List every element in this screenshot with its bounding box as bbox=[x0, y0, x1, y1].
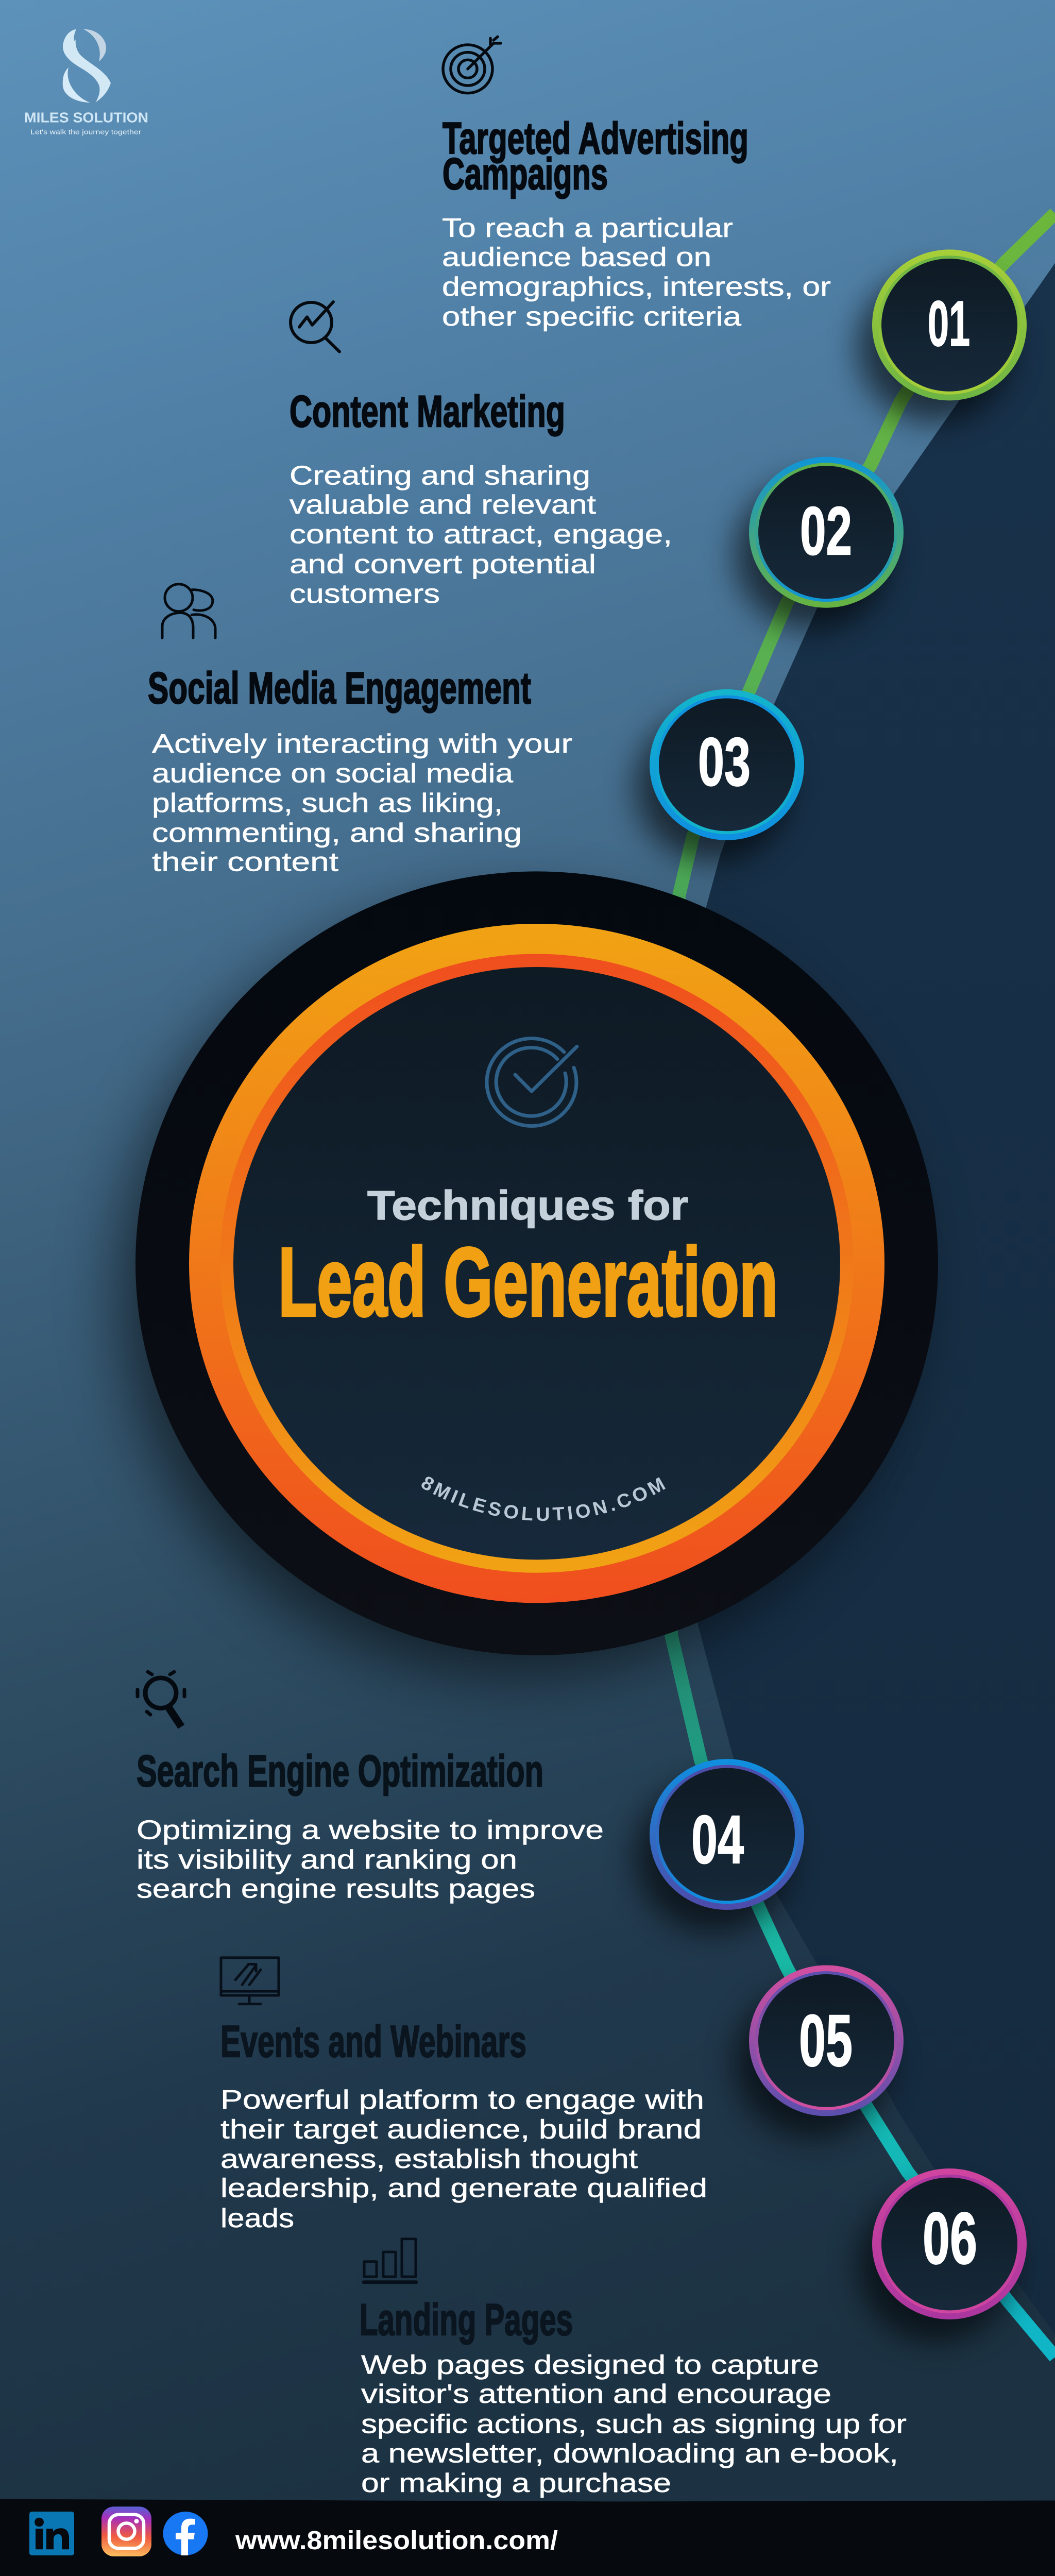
text 01: To reach a particular bbox=[442, 214, 733, 243]
connecting timeline line bbox=[670, 213, 1055, 2357]
text 01: demographics, interests, or bbox=[442, 273, 831, 302]
text 04 bbox=[137, 1816, 604, 1904]
logo: 8 Miles Solution bbox=[24, 29, 148, 136]
text 04: its visibility and ranking on bbox=[137, 1845, 517, 1875]
step 01: targeted advertising bbox=[442, 37, 831, 332]
text 05: Powerful platform to engage with bbox=[220, 2085, 704, 2115]
icon: instagram bbox=[101, 2506, 151, 2556]
text 01 bbox=[442, 214, 831, 332]
heading 01 bbox=[443, 114, 748, 199]
website url: www.8milesolution.com/ bbox=[235, 2526, 558, 2555]
heading 05: Events and Webinars bbox=[220, 2017, 526, 2066]
icon: facebook bbox=[163, 2512, 208, 2555]
badge 02 bbox=[735, 457, 904, 630]
text 02: Creating and sharing bbox=[290, 461, 590, 490]
badge 04 bbox=[636, 1759, 804, 1932]
text 06: visitor's attention and encourage bbox=[361, 2380, 831, 2409]
icon: target bbox=[443, 37, 501, 93]
icon: people bbox=[162, 584, 215, 638]
text 05: leads bbox=[220, 2204, 294, 2233]
curved website text: 8MILESOLUTION.COM bbox=[421, 1477, 666, 1521]
text 04: search engine results pages bbox=[137, 1874, 535, 1904]
badge 01: 01 bbox=[928, 287, 970, 360]
step 04: search engine optimization bbox=[137, 1672, 604, 1904]
badge 05 bbox=[735, 1965, 904, 2138]
text 03: audience on social media bbox=[152, 759, 514, 788]
text 01: other specific criteria bbox=[442, 302, 742, 332]
text 03: commenting, and sharing bbox=[152, 818, 522, 848]
text 02: content to attract, engage, bbox=[290, 520, 672, 550]
text 03: Actively interacting with your bbox=[152, 729, 572, 759]
text 05: awareness, establish thought bbox=[220, 2145, 638, 2174]
icon: analytics magnifier bbox=[291, 302, 339, 352]
text 02 bbox=[290, 461, 672, 609]
logo: 8 Miles Solution: MILES SOLUTION bbox=[24, 110, 148, 125]
footer bar bbox=[0, 2499, 1055, 2576]
text 03: their content bbox=[152, 848, 339, 877]
text 06: a newsletter, downloading an e-book, bbox=[361, 2439, 898, 2468]
step 02: content marketing bbox=[290, 302, 672, 609]
icon: linkedin bbox=[29, 2512, 74, 2555]
badge 06 bbox=[858, 2168, 1027, 2342]
text 05 bbox=[220, 2085, 707, 2233]
text 03 bbox=[152, 729, 572, 877]
icon: bar chart bbox=[364, 2239, 416, 2282]
badge 03 bbox=[636, 689, 804, 862]
text 05: leadership, and generate qualified bbox=[220, 2174, 707, 2204]
badge 01 bbox=[858, 249, 1027, 422]
text 02: customers bbox=[290, 579, 440, 609]
step 03: social media engagement bbox=[148, 584, 572, 877]
text 01: audience based on bbox=[442, 243, 711, 272]
heading 04: Search Engine Optimization bbox=[137, 1747, 543, 1796]
badge 02: 02 bbox=[800, 493, 852, 569]
text 06 bbox=[361, 2350, 907, 2498]
badge 04: 04 bbox=[691, 1802, 744, 1878]
text 05: their target audience, build brand bbox=[220, 2115, 702, 2144]
central circle bbox=[98, 866, 938, 1696]
dark right panel bbox=[690, 263, 1055, 2516]
text 02: and convert potential bbox=[290, 550, 596, 579]
text 02: valuable and relevant bbox=[290, 490, 597, 520]
step 06: landing pages bbox=[360, 2239, 907, 2498]
title line 1: Techniques for bbox=[367, 1183, 688, 1229]
heading 02: Content Marketing bbox=[290, 387, 565, 436]
logo: 8 Miles Solution: Let's walk the journey together bbox=[30, 128, 142, 136]
text 06: or making a purchase bbox=[361, 2468, 671, 2498]
title line 2: Lead Generation bbox=[278, 1227, 778, 1336]
icon: monitor with arrows bbox=[221, 1958, 279, 2004]
text 04: Optimizing a website to improve bbox=[137, 1816, 604, 1845]
heading 01: Campaigns bbox=[443, 149, 608, 199]
text 03: platforms, such as liking, bbox=[152, 789, 503, 818]
icon: gear magnifier bbox=[138, 1672, 184, 1727]
heading 06: Landing Pages bbox=[360, 2295, 573, 2345]
step 05: events and webinars bbox=[220, 1958, 707, 2233]
text 06: Web pages designed to capture bbox=[361, 2350, 819, 2380]
icon: check mark badge bbox=[487, 1039, 577, 1126]
badge 05: 05 bbox=[799, 1999, 853, 2081]
heading 03: Social Media Engagement bbox=[148, 664, 531, 713]
text 06: specific actions, such as signing up for bbox=[361, 2410, 907, 2439]
heading 01: Targeted Advertising bbox=[443, 114, 748, 163]
badge 06: 06 bbox=[923, 2197, 977, 2279]
badge 03: 03 bbox=[698, 724, 751, 800]
